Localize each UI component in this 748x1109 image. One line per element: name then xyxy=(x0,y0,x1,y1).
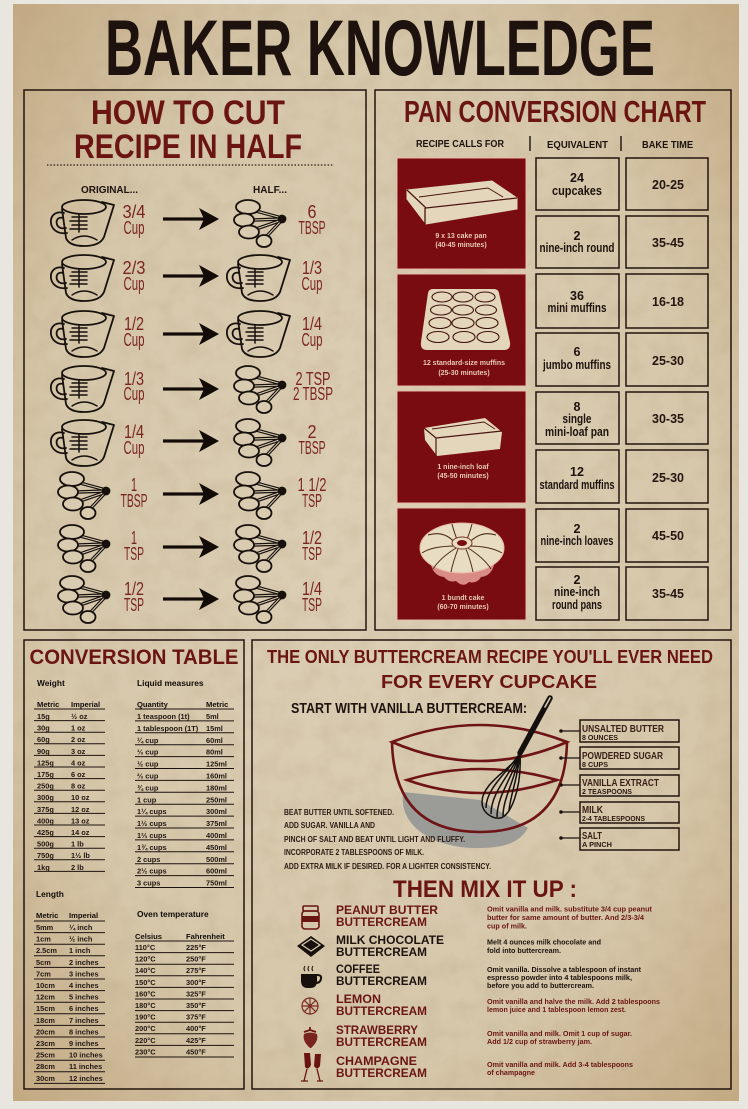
row: 1/2 tsp to 1/4 tsp: TSP xyxy=(302,595,322,615)
table: weight: 3 oz xyxy=(71,747,86,756)
illustration: bowl and whisk xyxy=(392,698,567,848)
row: 1 tbsp to 1 1/2 tsp: TBSP xyxy=(120,491,148,511)
table: liquid measures: Metric xyxy=(206,700,228,709)
table: liquid measures: 180ml xyxy=(206,783,227,792)
table: oven temperature: 200°C xyxy=(135,1024,156,1033)
table: oven temperature: Oven temperature xyxy=(137,909,209,919)
table: weight: 300g xyxy=(37,793,54,802)
table: length: 4 inches xyxy=(69,981,99,990)
ingredient: vanilla extract: 2 TEASPOONS xyxy=(582,787,632,796)
pan block: muffin tin xyxy=(397,274,526,386)
table: oven temperature: 375°F xyxy=(186,1013,206,1022)
table: weight: 1 lb xyxy=(71,840,84,849)
row: 1/4 cup to 2 tbsp xyxy=(51,419,326,466)
table: oven temperature: 250°F xyxy=(186,955,206,964)
table: length: ¼ inch xyxy=(69,923,93,932)
heading: how to cut: RECIPE IN HALF xyxy=(74,128,302,166)
table: liquid measures: 250ml xyxy=(206,795,227,804)
ingredient: unsalted butter: 8 OUNCES xyxy=(582,733,618,742)
table: liquid measures: 1 teaspoon (1t) xyxy=(137,712,190,721)
table: oven temperature: 350°F xyxy=(186,1001,206,1010)
table: liquid measures: 125ml xyxy=(206,760,227,769)
equivalent column boxes: 2 xyxy=(574,229,581,243)
table: weight: Imperial xyxy=(71,700,100,709)
equivalent column boxes: standard muffins xyxy=(540,478,615,492)
icon: jar xyxy=(302,906,319,929)
table: oven temperature: Celsius xyxy=(135,932,162,941)
bake time column boxes xyxy=(626,158,708,620)
table: oven temperature: 190°C xyxy=(135,1013,156,1022)
icon: coffee cup xyxy=(301,966,321,988)
row: 1 tbsp to 1 1/2 tsp: 1 xyxy=(131,475,137,495)
row: 1/3 cup to 2 tsp 2 tbsp: 1/3 xyxy=(124,369,144,389)
ingredient: salt: SALT xyxy=(582,830,602,842)
ingredient: milk: MILK xyxy=(582,804,603,816)
table: liquid measures: 750ml xyxy=(206,879,227,888)
variation: lemon: LEMON xyxy=(336,994,381,1006)
variation: milk chocolate xyxy=(297,935,601,959)
table: liquid measures: 1 cup xyxy=(137,795,157,804)
equivalent column boxes: 8 xyxy=(574,400,581,414)
table: weight: ½ oz xyxy=(71,712,88,721)
table: liquid measures: 160ml xyxy=(206,772,227,780)
table: length: 28cm xyxy=(36,1062,55,1071)
variation: strawberry: Omit vanilla and milk. Omit 1 cup of sugar. xyxy=(487,1029,632,1038)
row: 1 tsp to 1/2 tsp: 1 xyxy=(131,528,137,548)
table: oven temperature: 300°F xyxy=(186,978,206,987)
table: length: 15cm xyxy=(36,1004,55,1013)
table: length: 12cm xyxy=(36,993,55,1002)
ingredient: powdered sugar: 8 CUPS xyxy=(582,760,608,769)
table: liquid measures: ½ cup xyxy=(137,760,159,769)
row: 1/2 tsp to 1/4 tsp xyxy=(58,576,322,623)
icon: strawberry xyxy=(304,1027,317,1048)
table: length: 25cm xyxy=(36,1051,55,1060)
row: 2/3 cup to 1/3 cup: Cup xyxy=(124,274,144,294)
equivalent column boxes: cupcakes xyxy=(552,184,602,198)
row: 1 tsp to 1/2 tsp: TSP xyxy=(302,544,322,564)
row: 1/2 cup to 1/4 cup: 1/4 xyxy=(302,314,322,334)
table: weight: 60g xyxy=(37,735,50,744)
table: liquid measures: ⅓ cup xyxy=(137,748,159,757)
subheading: start with vanilla buttercream: START WITH VANILLA BUTTERCREAM: xyxy=(291,700,527,717)
variation: champagne: Omit vanilla and milk. Add 3-4 tablespoons xyxy=(487,1060,633,1069)
ingredient: salt: A PINCH xyxy=(582,840,612,849)
table: weight: 4 oz xyxy=(71,758,86,767)
row: 1/3 cup to 2 tsp 2 tbsp: 2 TBSP xyxy=(293,384,333,404)
table: oven temperature: Fahrenheit xyxy=(186,932,225,941)
pan block: nine-inch loaf xyxy=(397,391,526,503)
table: weight: 250g xyxy=(37,782,54,791)
icon: champagne flutes xyxy=(301,1053,323,1081)
table: oven temperature: 110°C xyxy=(135,943,156,952)
row: 1 tsp to 1/2 tsp: 1/2 xyxy=(302,528,322,548)
table: weight: Metric xyxy=(37,700,59,709)
panel: buttercream recipe xyxy=(252,640,731,1089)
variation: champagne xyxy=(301,1053,633,1081)
heading: conversion table: CONVERSION TABLE xyxy=(30,646,238,669)
ingredient: powdered sugar: POWDERED SUGAR xyxy=(582,750,663,762)
row: 1 tsp to 1/2 tsp: TSP xyxy=(124,544,144,564)
row: 3/4 cup to 6 tbsp: 6 xyxy=(308,202,316,222)
variation: milk chocolate: fold into buttercream. xyxy=(487,946,561,955)
table: length: 11 inches xyxy=(69,1062,102,1071)
table: oven temperature: 120°C xyxy=(135,955,156,964)
equivalent column boxes: mini-loaf pan xyxy=(545,425,609,439)
table: weight: 175g xyxy=(37,770,54,779)
equivalent column boxes xyxy=(536,158,619,620)
table: liquid measures: 5ml xyxy=(206,712,219,721)
table: length xyxy=(34,889,105,1083)
bake time column boxes: 45-50 xyxy=(652,529,684,543)
table: length: 1 inch xyxy=(69,946,91,955)
variation: milk chocolate: BUTTERCREAM xyxy=(336,947,427,959)
row: 1 tbsp to 1 1/2 tsp: TSP xyxy=(302,491,322,511)
bake time column boxes: 16-18 xyxy=(652,295,684,309)
equivalent column boxes: mini muffins xyxy=(548,301,607,315)
table: weight: 1½ lb xyxy=(71,851,90,860)
table: weight: 14 oz xyxy=(71,828,90,837)
variation: peanut butter: Omit vanilla and milk. substitute 3/4 cup peanut xyxy=(487,904,652,914)
pan block: bundt cake: 1 bundt cake xyxy=(442,595,484,602)
table: length: 23cm xyxy=(36,1039,55,1048)
variation: champagne: BUTTERCREAM xyxy=(336,1068,427,1080)
table: liquid measures: 500ml xyxy=(206,855,227,864)
equivalent column boxes: 24 xyxy=(570,171,584,185)
row: 1 tbsp to 1 1/2 tsp: 1 1/2 xyxy=(298,475,326,495)
variation: peanut butter: butter for same amount of butter. And 2/3-3/4 xyxy=(487,913,645,922)
variation: lemon: Omit vanilla and halve the milk. Add 2 tablespoons xyxy=(487,997,660,1006)
row: 1/2 tsp to 1/4 tsp: 1/2 xyxy=(124,579,144,599)
table: liquid measures: 3 cups xyxy=(137,879,160,888)
table: oven temperature: 225°F xyxy=(186,943,206,952)
variation: strawberry xyxy=(304,1025,632,1049)
column label: half: HALF... xyxy=(253,184,287,196)
table: weight: 13 oz xyxy=(71,816,90,825)
pan block: nine-inch loaf: (45-50 minutes) xyxy=(437,473,489,480)
table: length: 8 inches xyxy=(69,1027,99,1036)
variation: milk chocolate: MILK CHOCOLATE xyxy=(336,935,444,947)
table: weight: 15g xyxy=(37,712,50,721)
pan block: 9 x 13 cake pan xyxy=(397,158,526,269)
ingredient: salt xyxy=(559,828,679,850)
row: 1/2 tsp to 1/4 tsp: TSP xyxy=(124,595,144,615)
column headers: RECIPE CALLS FOR xyxy=(416,138,504,150)
ingredient: unsalted butter: UNSALTED BUTTER xyxy=(582,723,664,735)
bake time column boxes: 35-45 xyxy=(652,587,684,601)
table: weight: 125g xyxy=(37,758,54,767)
table: weight: 6 oz xyxy=(71,770,86,779)
table: liquid measures: 15ml xyxy=(206,724,223,733)
row: 1/4 cup to 2 tbsp: 2 xyxy=(308,422,316,442)
variation: peanut butter xyxy=(302,904,652,930)
table: length: 2.5cm xyxy=(36,946,57,955)
row: 1/2 cup to 1/4 cup: Cup xyxy=(302,330,322,350)
pan block: nine-inch loaf: 1 nine-inch loaf xyxy=(437,464,489,471)
row: 2/3 cup to 1/3 cup: 1/3 xyxy=(302,258,322,278)
pan block: bundt cake: (60-70 minutes) xyxy=(437,604,489,611)
table: liquid measures: 60ml xyxy=(206,736,223,745)
text: vanilla method: ADD EXTRA MILK IF DESIRED. FOR A LIGHTER CONSISTENCY. xyxy=(284,862,491,871)
table: oven temperature: 275°F xyxy=(186,966,206,975)
table: oven temperature: 140°C xyxy=(135,966,156,975)
variation: milk chocolate: Melt 4 ounces milk chocolate and xyxy=(487,938,601,946)
row: 3/4 cup to 6 tbsp xyxy=(51,200,326,247)
variation: coffee: COFFEE xyxy=(336,964,380,976)
ingredient: powdered sugar xyxy=(559,747,679,769)
text: vanilla method: PINCH OF SALT AND BEAT UNTIL LIGHT AND FLUFFY. xyxy=(284,835,465,844)
ingredient: vanilla extract: VANILLA EXTRACT xyxy=(582,777,659,789)
bake time column boxes: 20-25 xyxy=(652,178,684,192)
table: length: Imperial xyxy=(69,911,98,920)
table: weight: 2 oz xyxy=(71,735,86,744)
text: vanilla method: ADD SUGAR. VANILLA AND xyxy=(284,821,375,830)
table: length: 9 inches xyxy=(69,1039,99,1048)
table: liquid measures: ⅔ cup xyxy=(137,772,159,780)
equivalent column boxes: 2 xyxy=(574,573,581,587)
row: 2/3 cup to 1/3 cup: 2/3 xyxy=(122,258,146,278)
variation: lemon: BUTTERCREAM xyxy=(336,1006,427,1018)
variation: champagne: CHAMPAGNE xyxy=(336,1056,417,1068)
panel: conversion table xyxy=(24,640,244,1089)
table: length: 3 inches xyxy=(69,969,99,978)
table: liquid measures: 1 tablespoon (1T) xyxy=(137,724,199,733)
table: weight: 30g xyxy=(37,724,50,733)
table: oven temperature: 160°C xyxy=(135,989,156,998)
table: length: 10 inches xyxy=(69,1051,103,1060)
row: 2/3 cup to 1/3 cup xyxy=(51,255,323,301)
equivalent column boxes: nine-inch round xyxy=(540,241,614,255)
table: weight: 10 oz xyxy=(71,793,90,802)
equivalent column boxes: 2 xyxy=(574,522,581,536)
table: length: 6 inches xyxy=(69,1004,99,1013)
table: length: 5cm xyxy=(36,958,51,967)
variation: champagne: of champagne xyxy=(487,1068,535,1077)
table: liquid measures: 300ml xyxy=(206,807,227,816)
table: length: 12 inches xyxy=(69,1074,103,1083)
variation: lemon xyxy=(302,994,660,1018)
row: 1/2 cup to 1/4 cup: 1/2 xyxy=(124,314,144,334)
table: weight: 90g xyxy=(37,747,50,756)
table: length: 20cm xyxy=(36,1027,55,1036)
table: oven temperature: 180°C xyxy=(135,1001,156,1010)
row: 1/4 cup to 2 tbsp: Cup xyxy=(124,438,144,458)
table: length: Length xyxy=(36,889,64,899)
pan block: muffin tin: (25-30 minutes) xyxy=(438,370,490,377)
variation: strawberry: Add 1/2 cup of strawberry jam. xyxy=(487,1037,592,1046)
table: length: 7cm xyxy=(36,969,51,978)
variation: coffee: BUTTERCREAM xyxy=(336,976,427,988)
table: weight: 375g xyxy=(37,805,54,814)
row: 1/2 cup to 1/4 cup xyxy=(51,311,323,357)
equivalent column boxes: jumbo muffins xyxy=(542,358,611,372)
heading: buttercream recipe: FOR EVERY CUPCAKE xyxy=(381,672,597,692)
row: 3/4 cup to 6 tbsp: Cup xyxy=(124,218,144,238)
table: liquid measures xyxy=(135,678,234,888)
table: liquid measures: 80ml xyxy=(206,748,223,757)
pan block: 9 x 13 cake pan: 9 x 13 cake pan xyxy=(435,233,487,240)
equivalent column boxes: 6 xyxy=(574,345,581,359)
variation: coffee: before you add to buttercream. xyxy=(487,981,594,990)
table: length: 5mm xyxy=(36,923,54,932)
equivalent column boxes: nine-inch xyxy=(554,585,600,599)
ingredient: milk xyxy=(559,802,679,823)
row: 1 tbsp to 1 1/2 tsp xyxy=(58,472,326,519)
table: weight: Weight xyxy=(37,678,65,688)
column headers: EQUIVALENT xyxy=(547,139,609,151)
table: oven temperature xyxy=(135,909,234,1057)
table: oven temperature: 450°F xyxy=(186,1047,206,1056)
table: weight: 2 lb xyxy=(71,863,84,872)
equivalent column boxes: round pans xyxy=(552,598,602,612)
table: liquid measures: 2½ cups xyxy=(137,867,167,876)
table: liquid measures: 400ml xyxy=(206,831,227,840)
variation: coffee: Omit vanilla. Dissolve a tablespoon of instant xyxy=(487,965,641,974)
table: length: ½ inch xyxy=(69,935,93,944)
table: liquid measures: ¾ cup xyxy=(137,783,159,792)
panel: how to cut recipe in half xyxy=(24,90,366,630)
variation: strawberry: STRAWBERRY xyxy=(336,1025,418,1037)
table: weight: 1kg xyxy=(37,863,50,872)
table: weight: 750g xyxy=(37,851,54,860)
row: 1/4 cup to 2 tbsp: 1/4 xyxy=(124,422,144,442)
table: oven temperature: 150°C xyxy=(135,978,156,987)
pan block: 9 x 13 cake pan: (40-45 minutes) xyxy=(435,242,487,249)
table: length: 1cm xyxy=(36,935,51,944)
row: 3/4 cup to 6 tbsp: 3/4 xyxy=(122,202,146,222)
table: weight: 8 oz xyxy=(71,782,86,791)
pan block: bundt cake xyxy=(397,508,526,620)
table: length: 7 inches xyxy=(69,1016,99,1025)
column label: original: ORIGINAL... xyxy=(81,184,138,196)
table: oven temperature: 220°C xyxy=(135,1036,156,1045)
row: 1/2 tsp to 1/4 tsp: 1/4 xyxy=(302,579,322,599)
variation: peanut butter: PEANUT BUTTER xyxy=(336,905,439,917)
heading: then mix it up: THEN MIX IT UP : xyxy=(393,876,577,903)
equivalent column boxes: 36 xyxy=(570,289,584,303)
table: liquid measures: 1½ cups xyxy=(137,819,167,828)
column headers xyxy=(416,136,693,151)
table: weight xyxy=(34,678,105,872)
table: weight: 1 oz xyxy=(71,724,86,733)
table: length: 10cm xyxy=(36,981,55,990)
table: liquid measures: 375ml xyxy=(206,819,227,828)
text: vanilla method: BEAT BUTTER UNTIL SOFTENED. xyxy=(284,808,394,817)
pan block: muffin tin: 12 standard-size muffins xyxy=(423,360,505,367)
panel: pan conversion chart xyxy=(375,90,731,630)
icon: chocolate xyxy=(297,936,325,957)
table: length: 18cm xyxy=(36,1016,55,1025)
table: oven temperature: 400°F xyxy=(186,1024,206,1033)
row: 1/3 cup to 2 tsp 2 tbsp xyxy=(51,366,333,413)
table: length: Metric xyxy=(36,911,58,920)
heading: how to cut xyxy=(74,94,302,166)
heading: how to cut: HOW TO CUT xyxy=(91,94,285,132)
row: 1/2 cup to 1/4 cup: Cup xyxy=(124,330,144,350)
table: weight: 12 oz xyxy=(71,805,90,814)
row: 1/3 cup to 2 tsp 2 tbsp: 2 TSP xyxy=(296,369,330,389)
row: 1 tsp to 1/2 tsp xyxy=(58,525,322,572)
table: oven temperature: 325°F xyxy=(186,989,206,998)
table: oven temperature: 230°C xyxy=(135,1047,156,1056)
variation: coffee: espresso powder into 4 tablespoons milk, xyxy=(487,973,632,982)
bake time column boxes: 25-30 xyxy=(652,471,684,485)
table: liquid measures: 450ml xyxy=(206,843,227,852)
table: liquid measures: Quantity xyxy=(137,700,169,709)
bake time column boxes: 25-30 xyxy=(652,354,684,368)
table: weight: 425g xyxy=(37,828,54,837)
row: 1/4 cup to 2 tbsp: TBSP xyxy=(298,438,326,458)
equivalent column boxes: single xyxy=(562,412,592,426)
table: weight: 500g xyxy=(37,840,54,849)
row: 2/3 cup to 1/3 cup: Cup xyxy=(302,274,322,294)
text: vanilla method xyxy=(284,808,491,871)
ingredient: milk: 2-4 TABLESPOONS xyxy=(582,814,645,823)
variation: lemon: lemon juice and 1 tablespoon lemon zest. xyxy=(487,1005,626,1014)
table: length: 2 inches xyxy=(69,958,99,967)
heading: buttercream recipe: THE ONLY BUTTERCREAM RECIPE YOU'LL EVER NEED xyxy=(267,647,713,667)
table: length: 5 inches xyxy=(69,993,99,1002)
row: 1/3 cup to 2 tsp 2 tbsp: Cup xyxy=(124,384,144,404)
table: liquid measures: 1⅔ cups xyxy=(137,831,167,840)
variation: coffee xyxy=(301,964,641,990)
bake time column boxes: 30-35 xyxy=(652,412,684,426)
row: 3/4 cup to 6 tbsp: TBSP xyxy=(298,218,326,238)
equivalent column boxes: nine-inch loaves xyxy=(540,534,614,548)
table: liquid measures: ¼ cup xyxy=(137,736,159,745)
table: oven temperature: 425°F xyxy=(186,1036,206,1045)
table: length: 30cm xyxy=(36,1074,55,1083)
table: liquid measures: 2 cups xyxy=(137,855,160,864)
ingredient: vanilla extract xyxy=(559,775,679,796)
table: liquid measures: Liquid measures xyxy=(137,678,204,688)
table: liquid measures: 600ml xyxy=(206,867,227,876)
bake time column boxes: 35-45 xyxy=(652,236,684,250)
variation: peanut butter: cup of milk. xyxy=(487,922,527,930)
equivalent column boxes: 12 xyxy=(570,465,584,479)
variation: peanut butter: BUTTERCREAM xyxy=(336,917,427,929)
table: liquid measures: 1¾ cups xyxy=(137,843,167,852)
heading: buttercream recipe xyxy=(267,647,713,692)
table: weight: 400g xyxy=(37,816,54,825)
ingredient: unsalted butter xyxy=(559,720,679,742)
column headers: BAKE TIME xyxy=(642,139,693,151)
text: vanilla method: INCORPORATE 2 TABLESPOONS OF MILK. xyxy=(284,848,424,857)
table: liquid measures: 1¼ cups xyxy=(137,807,167,816)
icon: lemon slice xyxy=(302,998,318,1014)
variation: strawberry: BUTTERCREAM xyxy=(336,1037,427,1049)
